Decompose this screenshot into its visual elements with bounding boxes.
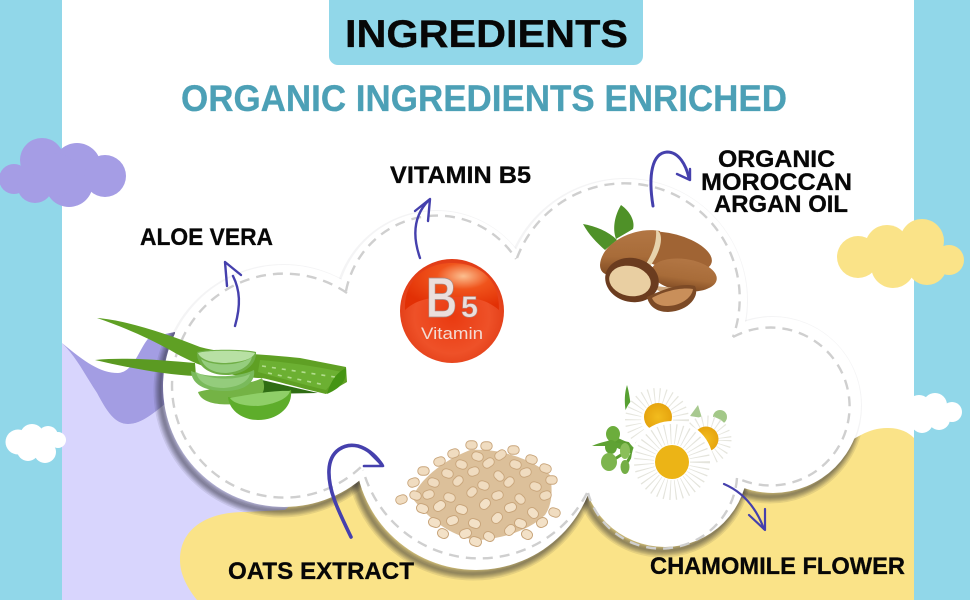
icon: vitamin b5: B <box>426 266 457 330</box>
label: vitamin b5: VITAMIN B5 <box>390 162 531 189</box>
label: argan oil: MOROCCAN <box>701 169 852 196</box>
label: oats extract: OATS EXTRACT <box>228 558 414 585</box>
dashed outline <box>172 183 850 558</box>
arrow: aloe <box>225 262 241 326</box>
arrow: chamomile <box>724 484 765 530</box>
icon: vitamin b5: 5 <box>461 291 478 324</box>
yellow wave: bottom <box>180 428 914 600</box>
panel: central cloud <box>160 179 861 574</box>
icon: aloe vera <box>95 318 347 420</box>
icon: argan nuts <box>583 205 719 312</box>
label: argan oil <box>701 146 852 218</box>
icon: vitamin b5 <box>400 259 504 363</box>
title: INGREDIENTS <box>345 13 628 56</box>
cloud: white right <box>901 393 962 433</box>
label: argan oil: ORGANIC <box>718 146 835 173</box>
icon: vitamin b5: Vitamin <box>421 324 483 343</box>
cloud: purple <box>0 138 126 207</box>
arrow: argan <box>651 152 690 206</box>
label: argan oil: ARGAN OIL <box>714 191 848 218</box>
icon: chamomile <box>592 385 732 503</box>
label: chamomile flower: CHAMOMILE FLOWER <box>650 553 905 580</box>
arrow: vitamin b5 <box>415 199 430 258</box>
icon: oats <box>400 445 556 542</box>
arrow: oats <box>329 445 383 537</box>
heading pill <box>329 0 643 65</box>
label: aloe vera: ALOE VERA <box>140 224 273 251</box>
subtitle: ORGANIC INGREDIENTS ENRICHED <box>181 78 787 119</box>
cloud: yellow <box>837 219 964 288</box>
cloud: white left <box>6 424 66 463</box>
lavender wave: lower left <box>62 332 300 600</box>
